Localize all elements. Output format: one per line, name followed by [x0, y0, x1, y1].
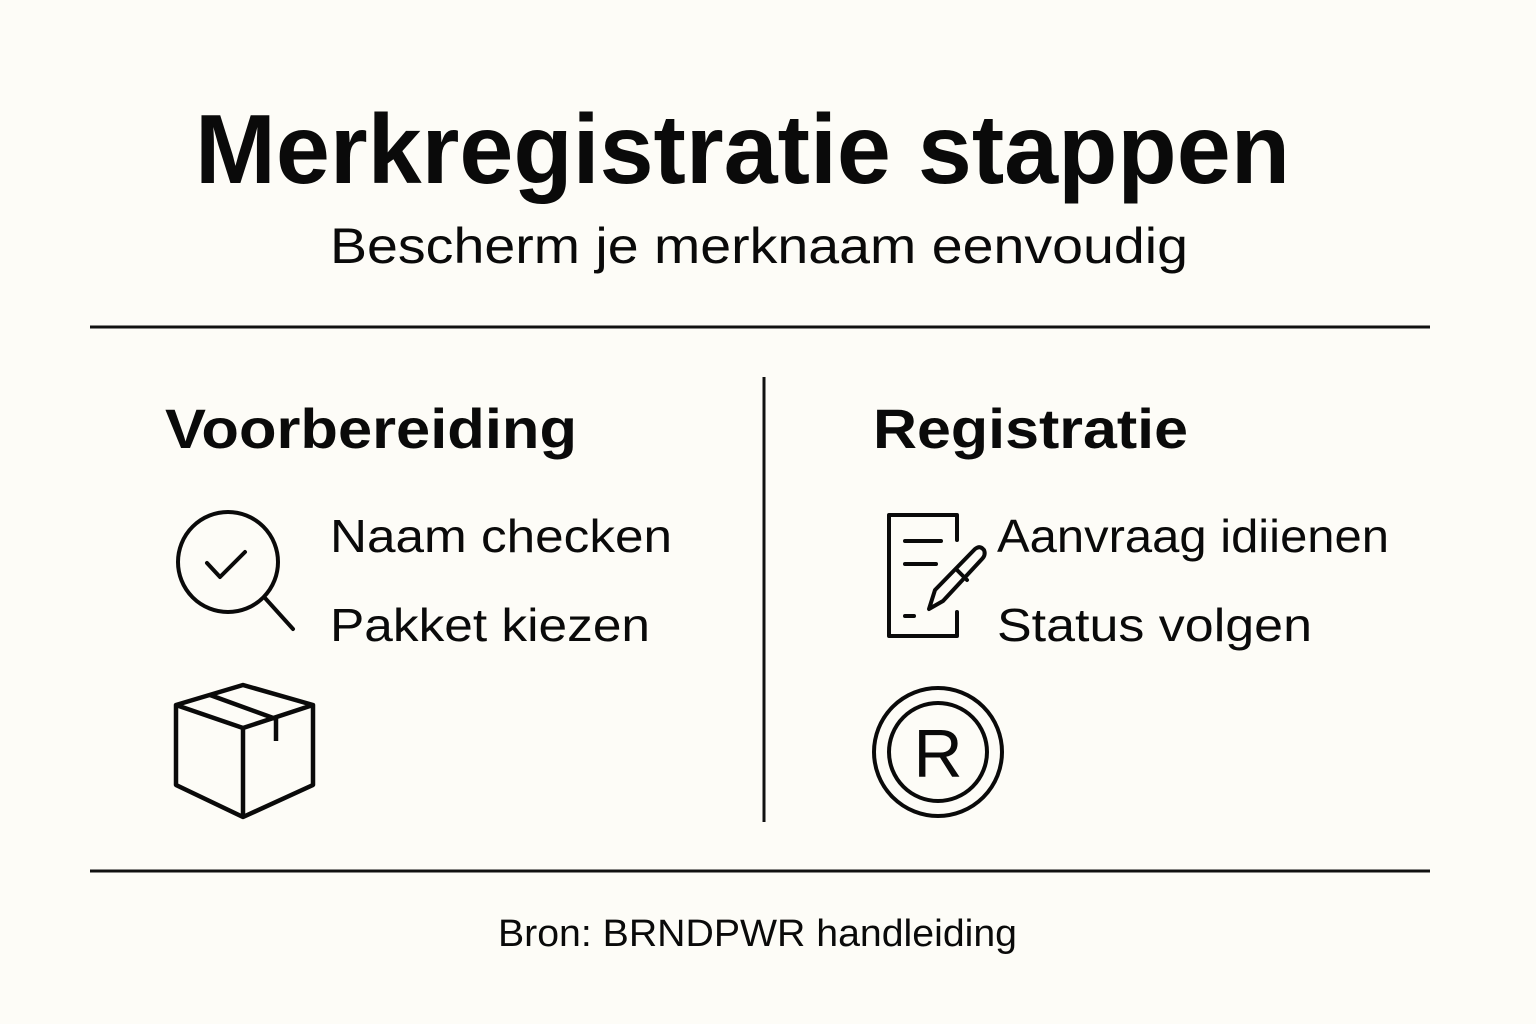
- panel: registratie: [873, 397, 1389, 816]
- text: Aanvraag idiienen: Aanvraag idiienen: [997, 510, 1389, 562]
- subtitle: Bescherm je merknaam eenvoudig: [330, 218, 1188, 274]
- title: Merkregistratie stappen: [195, 94, 1290, 204]
- text: Naam checken: Naam checken: [330, 510, 672, 562]
- icon: document with pen: [889, 515, 985, 636]
- heading: Registratie: Registratie: [873, 397, 1188, 460]
- footer source: Bron: BRNDPWR handleiding: [498, 913, 1017, 955]
- icon: box: [176, 685, 313, 817]
- panel: voorbereiding: [165, 397, 672, 817]
- icon: registered symbol: R: [913, 716, 963, 792]
- icon: magnifier with check: [178, 512, 293, 629]
- text: Status volgen: Status volgen: [997, 599, 1312, 651]
- icon: registered symbol: [874, 688, 1002, 816]
- heading: Voorbereiding: Voorbereiding: [165, 397, 577, 460]
- text: Pakket kiezen: Pakket kiezen: [330, 599, 650, 651]
